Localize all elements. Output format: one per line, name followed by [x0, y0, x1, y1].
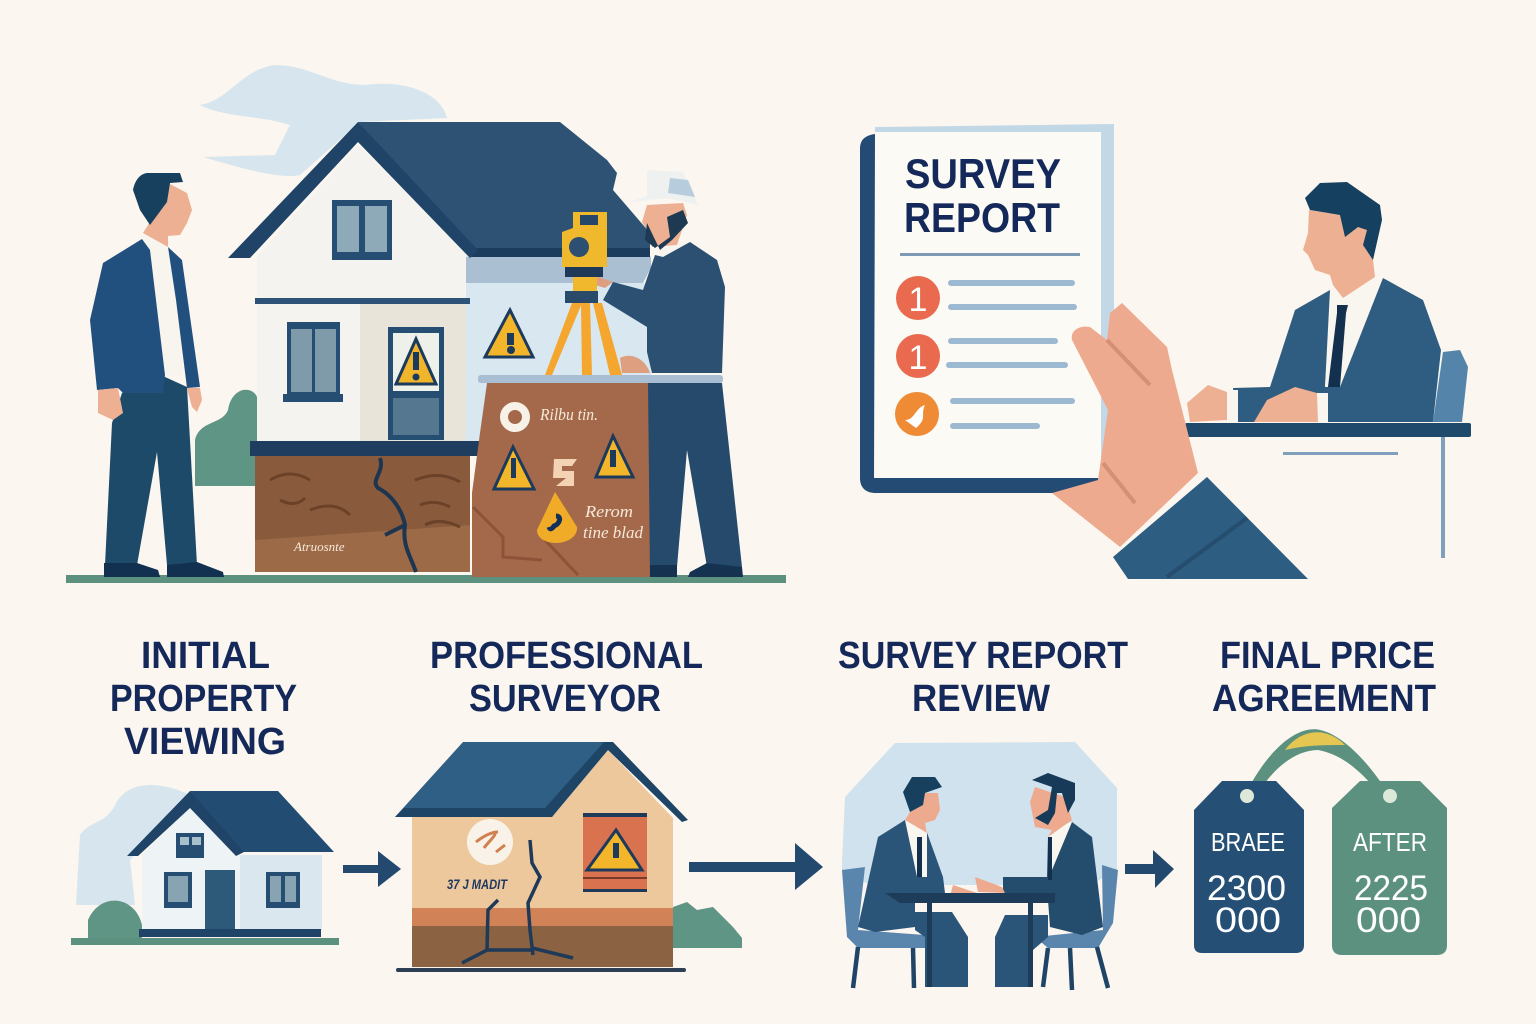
list item 2: 1 [909, 339, 927, 377]
list item 2 [896, 334, 1068, 378]
surveyor [593, 170, 743, 577]
title 2 [430, 635, 703, 720]
chairs [842, 865, 1118, 948]
list item 1: 1 [909, 281, 927, 319]
title 1: PROPERTY [110, 678, 297, 720]
cut-away board with warnings: Rerom [584, 502, 633, 521]
list item 1 [896, 276, 1077, 320]
crack [462, 840, 573, 963]
title 3: SURVEY REPORT [838, 635, 1128, 677]
after tag: 2225 [1354, 869, 1428, 908]
scene: property viewing and surveyor [66, 65, 786, 583]
step 1: small house [71, 785, 339, 945]
ring icon [504, 406, 526, 428]
window [332, 200, 392, 260]
chair back [1433, 350, 1468, 422]
title 3: REVIEW [912, 678, 1050, 720]
report title [904, 150, 1061, 241]
hand holding report [1052, 303, 1308, 579]
bush [195, 390, 258, 486]
left person [858, 777, 977, 987]
title 1: VIEWING [124, 721, 286, 763]
title 4 [1212, 635, 1436, 720]
title 2: PROFESSIONAL [430, 635, 703, 677]
surveying instrument on tripod [545, 212, 622, 375]
cut-away board with warnings [472, 383, 650, 577]
boarded window [583, 813, 647, 892]
arrow 1 [343, 851, 401, 887]
step 2: cracked house [395, 742, 742, 972]
seated man [1187, 182, 1441, 422]
sleeve [1113, 477, 1308, 579]
title 1: INITIAL [141, 635, 270, 677]
viewer man [90, 173, 224, 577]
foundation crack: Atruosnte [293, 539, 345, 554]
before tag: BRAEE [1211, 827, 1285, 857]
after tag: 000 [1356, 901, 1421, 940]
step titles [110, 635, 1436, 763]
warning sign [596, 436, 633, 477]
title 4: FINAL PRICE [1220, 635, 1435, 677]
ledge [478, 375, 723, 383]
report title: SURVEY [905, 150, 1061, 197]
step 3: meeting [842, 742, 1118, 990]
list item 3 [895, 392, 1075, 436]
step 2: cracked house: 37 J MADIT [447, 876, 508, 892]
cut-away board with warnings: Rilbu tin. [539, 405, 598, 424]
arrow 2 [689, 843, 823, 890]
title 2: SURVEYOR [469, 678, 661, 720]
table [885, 893, 1055, 987]
before tag [1194, 781, 1304, 953]
before tag: 2300 [1207, 869, 1286, 908]
after tag: AFTER [1353, 827, 1427, 857]
right person [975, 773, 1103, 987]
foundation crack [255, 456, 470, 572]
house [228, 122, 651, 572]
window [283, 322, 343, 402]
warning sign [494, 447, 534, 489]
ribbon [1245, 729, 1392, 800]
title 3 [838, 635, 1128, 720]
report document [860, 124, 1114, 493]
title 4: AGREEMENT [1212, 678, 1436, 720]
title 1 [110, 635, 297, 763]
pouch icon [537, 492, 577, 543]
plaster patch [467, 819, 513, 865]
after tag [1332, 781, 1447, 955]
chair legs [853, 947, 1108, 990]
arrow 3 [1125, 850, 1174, 888]
desk [1185, 423, 1471, 558]
before tag: 000 [1215, 901, 1281, 940]
door [388, 327, 444, 440]
flame icon [553, 459, 577, 486]
ground line [66, 575, 786, 583]
backdrop [842, 742, 1117, 885]
cloud [200, 65, 447, 176]
cut-away board with warnings: tine blad [583, 523, 643, 542]
scene: survey report [860, 124, 1471, 579]
report title: REPORT [904, 194, 1060, 241]
warning sign [485, 310, 533, 357]
step 4: price tags [1194, 729, 1447, 955]
